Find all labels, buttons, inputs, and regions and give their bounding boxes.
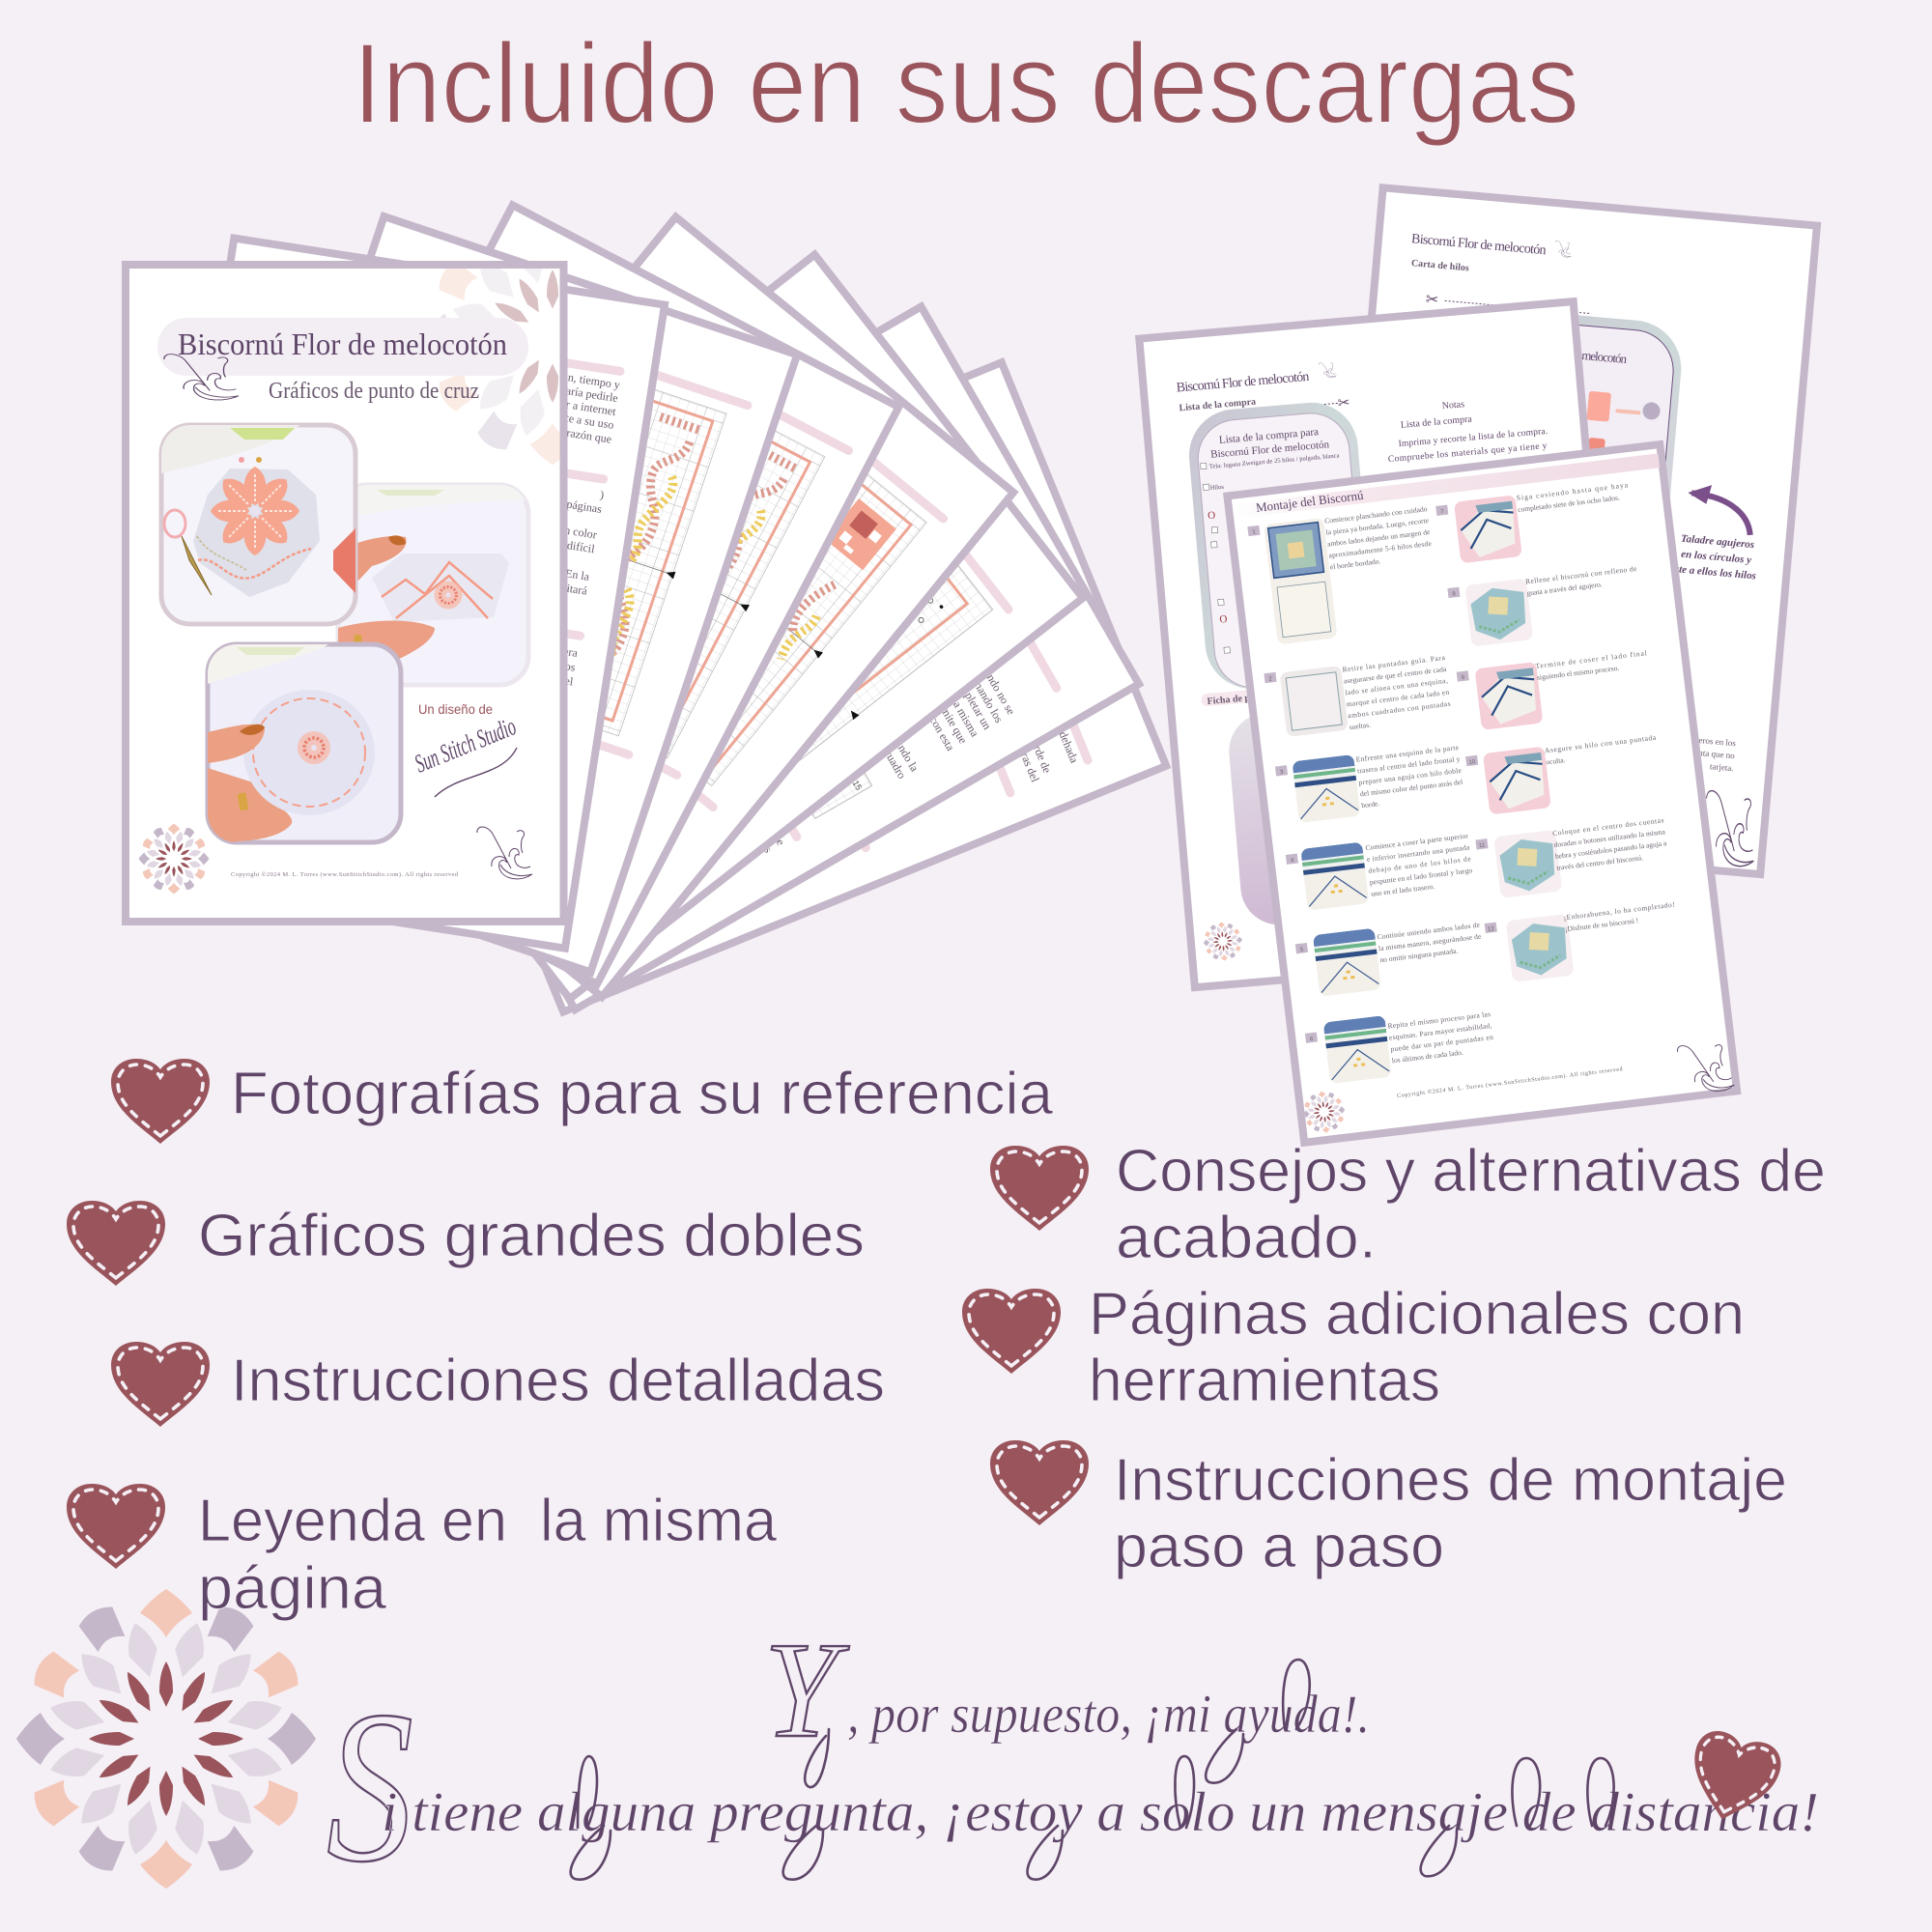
small flourish <box>1677 1040 1735 1095</box>
page: lista de la compra: Notas <box>1441 399 1465 412</box>
page: montaje del biscornu: 7 <box>1440 509 1445 515</box>
arrow: curved to holes <box>1685 483 1754 535</box>
page: carta de hilos: Carta de hilos <box>1410 258 1469 273</box>
page: carta de hilos <box>1326 187 1817 874</box>
item: fotografias: Fotografías para su referencia <box>231 1061 1054 1127</box>
large mandala <box>16 1589 316 1889</box>
step 2 to 6 photos <box>1279 666 1392 1084</box>
step text left column <box>1324 504 1495 1065</box>
page: instructions 6: ermite que <box>934 696 970 746</box>
step text left column: pespunte en el lado frontal y luego <box>1369 866 1473 887</box>
page: introduction text: s páginas <box>558 496 603 516</box>
page: introduction text: gar a internet <box>554 396 617 418</box>
page: instructions 6: uando no se <box>979 663 1018 717</box>
step text right column: guata a través del agujero. <box>1526 580 1603 597</box>
small mandala <box>1301 1089 1348 1135</box>
faded mandala <box>439 269 560 465</box>
step text left column: la misma manera, asegurándose de <box>1378 932 1482 952</box>
page: instructions 6: ormando los <box>965 668 1007 725</box>
step text left column: los últimos de cada lado. <box>1391 1048 1463 1065</box>
page: introduction text: en color <box>558 523 598 542</box>
script message: S <box>327 1665 413 1907</box>
item: montaje: paso a paso <box>1114 1514 1444 1580</box>
photo: top view with flower <box>161 425 355 624</box>
icon: heart 4 <box>67 1484 165 1569</box>
item: paginas adicionales <box>1089 1281 1745 1414</box>
page: lista de la compra: O <box>1219 613 1228 626</box>
page: introduction text: En la <box>564 566 591 583</box>
step text right column: través del centro del biscornú. <box>1556 853 1644 872</box>
step text right column: Rellene el biscornú con relleno de <box>1525 564 1637 586</box>
copyright: Copyright ©2024 M. L. Torres (www.SunStitchStudio.com). All rights reserved <box>231 871 459 878</box>
step text left column: no omitir ninguna puntada. <box>1379 947 1459 964</box>
icon: heart 5 <box>990 1146 1089 1231</box>
page: carta de hilos: tarjeta. <box>1710 761 1734 773</box>
page: chart 3 <box>211 205 898 984</box>
page: lista de la compra: Hilos <box>1210 484 1225 492</box>
item: leyenda: página <box>198 1555 387 1622</box>
item: paginas adicionales: herramientas <box>1089 1348 1440 1414</box>
item: montaje: Instrucciones de montaje <box>1114 1447 1787 1514</box>
item: graficos: Gráficos grandes dobles <box>198 1203 865 1269</box>
page: montaje del biscornu: 11 <box>1479 842 1486 849</box>
page: instructions 6: e con esta <box>923 707 957 753</box>
script message: i tiene alguna pregunta, ¡estoy a solo un mensaje de distancia! <box>382 1780 1819 1843</box>
page: montaje del biscornu: 9 <box>1461 675 1465 681</box>
page: montaje del biscornu: 10 <box>1468 759 1476 766</box>
page: introduction text: ) <box>599 488 605 501</box>
page: instructions 7: a dehada <box>1053 722 1082 765</box>
step text left column: borde. <box>1361 799 1380 810</box>
step text left column: ambos lados dejando un margen de <box>1327 527 1431 549</box>
page copyright: Copyright ©2024 M. L. Torres (www.SunStitchStudio.com). All rights reserved <box>1397 1065 1623 1099</box>
item: paginas adicionales: Páginas adicionales con <box>1089 1281 1745 1348</box>
page: introduction text: el <box>564 673 575 689</box>
step text left column: ambos cuadrados con puntadas <box>1348 699 1451 720</box>
step text left column: prepare una aguja con hilo doble <box>1358 766 1463 786</box>
icon: heart 1 <box>111 1059 210 1144</box>
step text right column: hebra y cosiéndolos pasando la aguja a <box>1554 838 1667 861</box>
note: drill holes: ate a ellos los hilos <box>1673 563 1756 582</box>
page: carta de hilos: melocotón <box>1581 348 1628 366</box>
page: lista de la compra: Compruebe los materials que ya tiene y <box>1388 441 1548 465</box>
step text left column: sueltas. <box>1349 721 1371 731</box>
page: lista de la compra <box>1139 301 1629 987</box>
ornament: flourish <box>477 827 532 879</box>
page: lista de la compra: Biscornú Flor de melocotón <box>1210 439 1330 461</box>
script message: , por supuesto, ¡mi ayuda!. <box>847 1685 1370 1745</box>
page: introduction text: ustaría pedirle <box>552 382 619 405</box>
cover subtitle: Gráficos de punto de cruz <box>269 379 479 404</box>
item: montaje <box>1114 1447 1787 1580</box>
page: montaje del biscornu: 4 <box>1291 858 1294 864</box>
step text right column: ¡Enhorabuena, lo ha completado! <box>1563 900 1675 922</box>
step text left column: e inferior insertando una puntada <box>1366 842 1470 864</box>
photo: back view in hand <box>208 644 401 842</box>
step text right column: completado siete de los ocho lados. <box>1518 493 1620 514</box>
note: drill holes: en los círculos y <box>1681 549 1752 566</box>
page: lista de la compra: O <box>1208 510 1216 522</box>
step text right column: ¡Disfrute de su biscornú ! <box>1564 916 1639 933</box>
panel: right page stack <box>1139 187 1817 1143</box>
page: instructions 7: caras del <box>1014 741 1042 784</box>
step 1 photo <box>1264 518 1338 644</box>
page: carta de hilos: Biscornú Flor de melocotón <box>1410 232 1547 258</box>
step text left column: debajo de uno de los hilos de <box>1368 854 1472 875</box>
page: chart 5 <box>301 255 1083 999</box>
panel: cover page <box>122 261 568 925</box>
icon: heart 2 <box>67 1201 165 1286</box>
step numbers <box>1244 502 1511 1043</box>
page: chart 2 <box>178 216 797 972</box>
page: lista de la compra: Lista de la compra <box>1179 397 1257 413</box>
step text right column <box>1512 480 1680 933</box>
script message <box>327 1613 1819 1907</box>
step text right column: Siga cosiendo hasta que haya <box>1516 480 1629 502</box>
step text left column: Enfrente una esquina de la parte <box>1355 743 1460 764</box>
page: lista de la compra: Ficha de p <box>1207 693 1251 707</box>
step text left column: aproximadamente 5-6 hilos desde <box>1328 539 1433 559</box>
page: instructions 6: ompletar un <box>954 677 994 732</box>
page: introduction text: n difícil <box>557 537 596 555</box>
page: lista de la compra: ✂ <box>1337 393 1350 412</box>
page: montaje del biscornu: 3 <box>1280 770 1284 776</box>
page: introduction text: sitará <box>561 581 588 598</box>
ornament: feather swirl <box>164 355 239 400</box>
page: instructions 7: e <box>843 846 858 856</box>
step text right column: Asegure su hilo con una puntada <box>1544 733 1657 754</box>
page: introduction text: era <box>562 644 580 660</box>
page: lista de la compra: Lista de la compra para <box>1218 426 1319 446</box>
page: montaje del biscornu: 5 <box>1300 947 1304 953</box>
cover title pill <box>157 318 528 376</box>
icon: heart 3 <box>111 1342 210 1427</box>
icon: heart 6 <box>962 1289 1061 1374</box>
page: instructions 6: n la misma <box>945 689 982 740</box>
step text left column: Comience planchando con cuidado <box>1324 504 1428 526</box>
page: instructions 7: borde de <box>1026 732 1054 775</box>
step text left column: Comience a coser la parte superior <box>1365 831 1469 852</box>
step text left column: Continúe uniendo ambos lados de <box>1377 921 1481 941</box>
page: introduction text <box>134 239 665 949</box>
fan of chart pages <box>134 205 1166 1011</box>
page: instructions 6 <box>357 306 1139 1009</box>
step text right column: Coloque en el centro dos cuentas <box>1552 815 1664 838</box>
item: consejos: Consejos y alternativas de <box>1116 1138 1826 1205</box>
step text left column: uno en el lado trasero. <box>1371 882 1435 898</box>
step text left column: la pieza ya bordada. Luego, recorte <box>1325 516 1430 537</box>
heading: Montaje del Biscornú <box>1255 488 1365 515</box>
page: carta de hilos: agujeros en los <box>1684 734 1737 748</box>
step text left column: trasera al centro del lado frontal y <box>1357 754 1461 776</box>
note: drill holes <box>1673 532 1759 582</box>
designer credit: Un diseño de <box>418 702 493 717</box>
title: Incluido en sus descargas <box>353 20 1579 148</box>
step 7 to 12 photos <box>1453 495 1575 982</box>
step text left column: puede dar un par de puntadas en <box>1390 1033 1493 1053</box>
icon: heart 8 <box>1680 1726 1786 1831</box>
designer logo: signature <box>411 712 520 797</box>
step text left column: del mismo color del punto atrás del <box>1359 778 1463 798</box>
item: consejos <box>1116 1138 1826 1271</box>
step text right column: oculta. <box>1546 755 1566 766</box>
page: montaje del biscornu: 6 <box>1310 1037 1314 1042</box>
page: chart 4 <box>265 217 1013 997</box>
photo: side view in hand <box>338 485 528 685</box>
page: instructions 6: cuadro <box>881 747 909 781</box>
page: montaje del biscornu: 12 <box>1488 926 1495 933</box>
step text right column: Termine de coser el lado final <box>1535 648 1647 670</box>
page: instructions 7 <box>399 362 1166 1011</box>
item: instrucciones detalladas: Instrucciones detalladas <box>231 1348 885 1414</box>
page: introduction text: corazón que <box>554 424 612 446</box>
page: lista de la compra: Tela: lugana Zweigart de 25 hilos / pulgada, blanca <box>1209 452 1340 470</box>
page: instructions 6: 15 <box>851 779 864 792</box>
icon: heart 7 <box>990 1440 1089 1525</box>
mandala logo small <box>139 824 209 894</box>
step text right column: siguiendo el mismo proceso. <box>1536 664 1620 682</box>
designer logo: signature: Sun Stitch Studio <box>411 712 520 779</box>
step text left column: marque el centro de cada lado en <box>1346 688 1450 708</box>
page: instructions 6: os <box>758 839 776 855</box>
item: leyenda <box>198 1488 778 1622</box>
script message: Y <box>764 1613 850 1766</box>
step text left column: esquinas. Para mayor estabilidad, <box>1388 1021 1492 1042</box>
page: lista de la compra: Biscornú Flor de melocotón <box>1176 370 1310 396</box>
page: carta de hilos: uenta que no <box>1690 747 1736 760</box>
note: drill holes: Taladre agujeros <box>1680 533 1755 551</box>
step text left column: lado se alinea con una esquina, <box>1345 676 1448 696</box>
page: lista de la compra: Lista de la compra <box>1400 413 1473 431</box>
page: introduction text: ente a su uso <box>554 410 614 432</box>
step text left column: Retire las puntadas guía. Para <box>1342 653 1446 674</box>
page: montaje del biscornu <box>1227 444 1737 1143</box>
page: introduction text: os <box>564 659 577 674</box>
step text left column: asegurarse de que el centro de cada <box>1343 665 1447 686</box>
page: instructions 6: de <box>771 832 788 848</box>
page: montaje del biscornu: 8 <box>1452 591 1457 598</box>
page: instructions 6: tando la <box>892 735 922 775</box>
step text left column: Repita el mismo proceso para las <box>1387 1009 1491 1031</box>
cover title pill: Biscornú Flor de melocotón <box>178 327 507 361</box>
page: introduction text: azón, tiempo y <box>552 368 621 391</box>
item: leyenda: Leyenda en la misma <box>198 1488 778 1554</box>
page: carta de hilos: ✂ <box>1425 290 1439 309</box>
item: consejos: acabado. <box>1116 1205 1377 1271</box>
step text left column: el borde bordado. <box>1329 556 1381 571</box>
step text right column: doradas o botones utilizando la misma <box>1553 827 1666 849</box>
page: lista de la compra: Imprima y recorte la lista de la compra. <box>1398 427 1548 449</box>
page: montaje del biscornu: 2 <box>1268 676 1273 683</box>
page: montaje del biscornu: 1 <box>1252 529 1257 536</box>
